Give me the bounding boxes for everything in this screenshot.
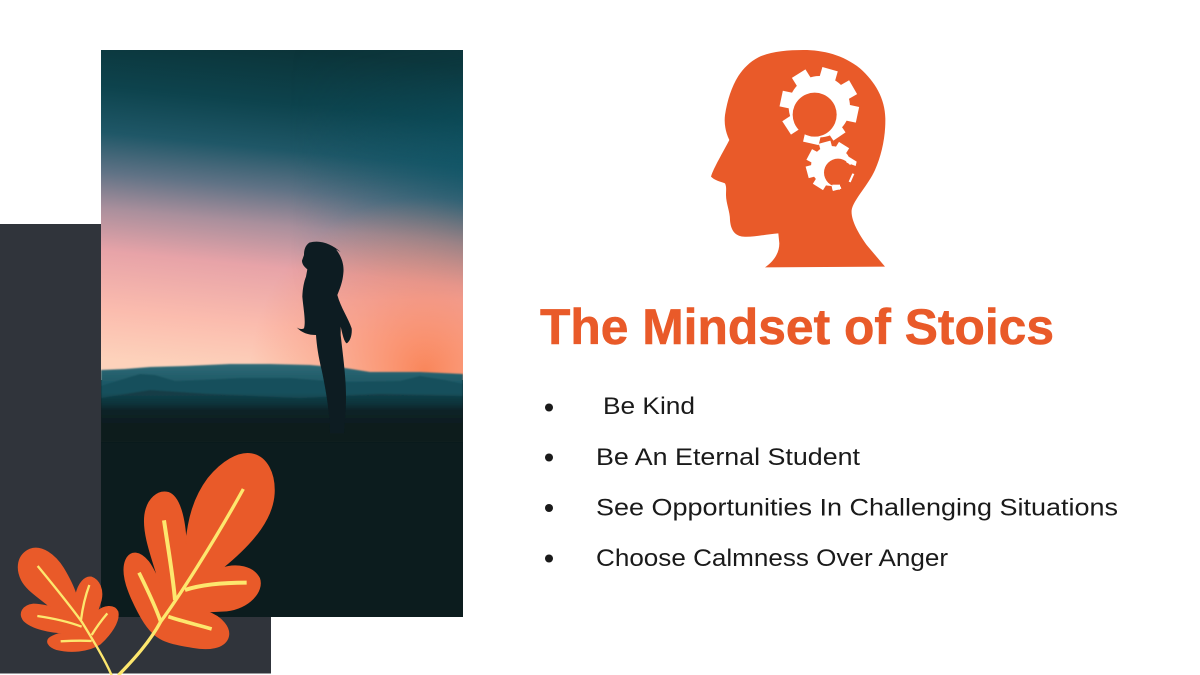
title: The Mindset of Stoics <box>540 299 1054 355</box>
list item: Be An Eternal Student: Be An Eternal Student <box>596 444 860 471</box>
head silhouette <box>711 50 885 267</box>
small gear <box>806 141 860 191</box>
leaf veins <box>37 489 247 675</box>
large leaf <box>124 454 274 648</box>
icon: autumn leaves <box>18 454 274 675</box>
dark backing panel <box>0 224 271 674</box>
large gear <box>780 67 859 145</box>
small leaf <box>18 548 118 651</box>
list item: Be Kind: Be Kind <box>603 393 695 420</box>
bullet list <box>545 393 1118 572</box>
list item: See Opportunities In Challenging Situations: See Opportunities In Challenging Situations <box>596 494 1118 522</box>
icon: head with gears <box>711 50 885 267</box>
list item: Choose Calmness Over Anger: Choose Calmness Over Anger <box>596 545 948 572</box>
photo: silhouette of a woman at sunset <box>101 50 463 617</box>
list item: Be Kind <box>545 393 695 420</box>
